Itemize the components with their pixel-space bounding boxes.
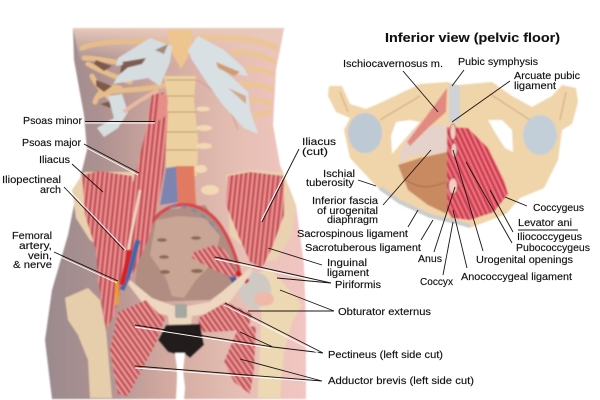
piriformis <box>192 245 236 278</box>
label: arcuate pubic ligament <box>452 71 580 122</box>
torso and thighs silhouette <box>45 28 306 399</box>
spinal transverse processes <box>195 106 219 195</box>
label: ischial tuberosity: tuberosity <box>306 178 355 189</box>
label: inguinal ligament: Inguinal <box>327 258 367 269</box>
left costal cartilage <box>113 38 172 86</box>
label: anococcygeal ligament <box>453 210 572 283</box>
left femur <box>65 288 112 398</box>
label: obturator externus: Obturator externus <box>338 307 431 318</box>
pubic symphysis <box>449 85 460 122</box>
pelvic cavity <box>135 205 240 302</box>
label: femoral artery, vein, and nerve: & nerve <box>13 260 52 271</box>
label: pectineus: Pectineus (left side cut) <box>328 350 443 361</box>
label: inferior fascia of urogenital diaphragm: diaphragm <box>327 215 378 226</box>
label: arcuate pubic ligament: ligament <box>514 81 556 92</box>
label: sacrospinous ligament: Sacrospinous ligament <box>297 229 408 240</box>
label: iliopectineal arch: arch <box>40 185 61 196</box>
label: femoral artery, vein, and nerve: vein, <box>28 251 52 262</box>
label: femoral artery, vein, and nerve <box>12 231 118 283</box>
levator ani muscle <box>447 127 508 220</box>
label: iliacus <box>39 155 103 192</box>
label: inferior fascia of urogenital diaphragm: of urogenital <box>317 206 378 217</box>
label: levator ani: Levator ani <box>518 218 572 229</box>
right femur <box>244 268 302 398</box>
pubic hair shadow <box>158 324 204 358</box>
label: coccygeus <box>505 197 584 214</box>
left psoas muscles <box>120 92 168 280</box>
label: anus: Anus <box>418 254 442 265</box>
label: piriformis <box>215 257 381 291</box>
right iliacus <box>226 172 284 268</box>
label: pubococcygeus <box>466 162 590 254</box>
right acetabulum <box>523 115 557 155</box>
label: coccyx: Coccyx <box>420 277 453 288</box>
lumbar spine <box>164 76 198 176</box>
label: iliacus (cut) <box>261 137 336 222</box>
left iliacus <box>82 171 136 330</box>
label: ischial tuberosity <box>306 169 376 189</box>
label: inguinal ligament <box>268 248 369 279</box>
label: obturator externus <box>248 290 431 318</box>
right rib cage <box>196 37 276 118</box>
label: piriformis: Piriformis <box>335 280 381 291</box>
right femoral head <box>239 272 271 308</box>
label: coccygeus: Coccygeus <box>533 203 584 214</box>
label: inguinal ligament: ligament <box>327 268 369 279</box>
pubic bones <box>128 268 253 334</box>
label: pubic symphysis <box>452 57 538 86</box>
label: iliopectineal arch <box>2 175 126 250</box>
urogenital openings <box>448 124 458 194</box>
label: urogenital openings <box>453 150 573 266</box>
pelvic brim vessels <box>152 205 240 276</box>
right costal cartilage <box>188 36 258 134</box>
label: psoas minor: Psoas minor <box>23 116 83 127</box>
left ilium bone <box>72 172 138 258</box>
label: adductor brevis <box>135 359 474 387</box>
right rib shadow sections <box>197 80 238 130</box>
left pectineus and adductor <box>110 300 166 396</box>
label: psoas major <box>22 138 139 175</box>
illustration: inferior view of pelvic floor <box>328 82 578 228</box>
right femoral vessels <box>226 264 238 288</box>
label: urogenital openings: Urogenital openings <box>476 255 573 266</box>
label: psoas major: Psoas major <box>22 138 82 149</box>
label: iliopectineal arch: Iliopectineal <box>2 175 61 186</box>
label: inferior fascia of urogenital diaphragm <box>312 150 431 226</box>
right obturator foramen <box>488 120 513 152</box>
label: pubococcygeus: Pubococcygeus <box>516 243 590 254</box>
label: ischial tuberosity: Ischial <box>323 169 355 180</box>
left rib cage <box>82 41 165 102</box>
right ilium bone <box>226 170 296 262</box>
left cartilage slots <box>122 58 146 68</box>
label: psoas minor <box>23 116 155 127</box>
label: ischiocavernosus: Ischiocavernosus m. <box>343 59 443 70</box>
title: Inferior view (pelvic floor) <box>385 30 560 45</box>
label: iliococcygeus: Iliococcygeus <box>517 232 582 243</box>
label: sacrospinous ligament <box>297 210 418 240</box>
label: iliococcygeus <box>490 190 582 243</box>
sternum <box>168 30 192 69</box>
illustration: anterior view of torso and pelvis <box>45 28 306 399</box>
sacrum <box>150 216 220 298</box>
label: anus <box>418 187 455 265</box>
pale psoas tendon strip <box>128 190 140 250</box>
label: arcuate pubic ligament: Arcuate pubic <box>514 71 580 82</box>
label: iliacus (cut): (cut) <box>302 147 328 158</box>
left acetabulum <box>348 113 382 153</box>
upper chest skin <box>73 28 284 62</box>
right adductor brevis <box>224 326 256 394</box>
label: sacrotuberous ligament <box>305 220 433 254</box>
sacrotuberous and sacrospinous ligaments <box>380 188 470 226</box>
right obturator and pectineus <box>198 302 252 332</box>
label: femoral artery, vein, and nerve: Femoral <box>12 231 52 242</box>
left and right hip bones <box>328 82 578 228</box>
left lower rib cartilage <box>97 94 128 137</box>
label: ischiocavernosus <box>343 59 443 112</box>
label: adductor brevis: Adductor brevis (left side cut) <box>328 376 474 387</box>
label: femoral artery, vein, and nerve: artery, <box>19 241 52 252</box>
label: pubic symphysis: Pubic symphysis <box>458 57 538 68</box>
label: iliacus: Iliacus <box>39 155 70 166</box>
label: sacrotuberous ligament: Sacrotuberous ligament <box>305 243 421 254</box>
left rib gaps <box>94 58 148 108</box>
label: iliacus (cut): Iliacus <box>302 137 336 148</box>
label: inferior fascia of urogenital diaphragm: Inferior fascia <box>312 196 378 207</box>
ischiocavernosus muscle <box>407 88 447 146</box>
rectal fossa <box>398 152 447 214</box>
left obturator foramen <box>391 120 420 154</box>
label: anococcygeal ligament: Anococcygeal ligament <box>461 272 572 283</box>
right cartilage slots <box>216 62 240 76</box>
perineal membrane <box>398 124 448 165</box>
left femoral vessels <box>122 240 138 290</box>
pubic symphysis <box>175 304 187 318</box>
label: pectineus <box>135 303 443 361</box>
label: coccyx <box>420 222 453 288</box>
gap between thighs <box>175 353 185 399</box>
aorta and vena cava <box>160 166 180 205</box>
